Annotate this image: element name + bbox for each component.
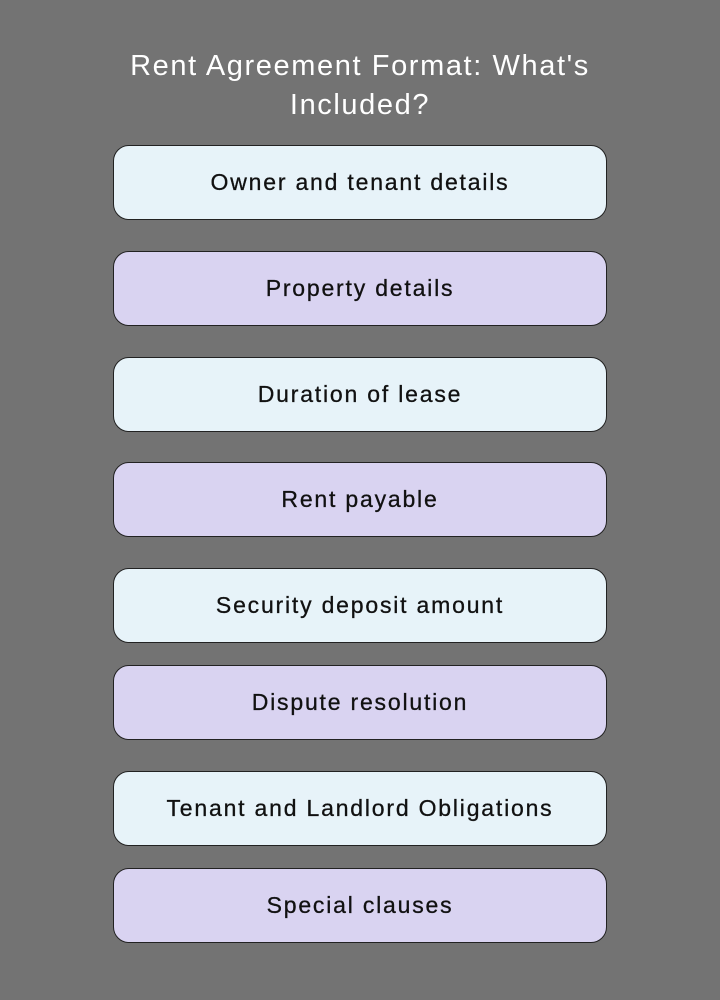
item: dispute resolution bbox=[113, 665, 607, 740]
item: special clauses: Special clauses bbox=[267, 892, 453, 918]
item: obligations: Tenant and Landlord Obligations bbox=[166, 795, 554, 821]
item: security deposit: Security deposit amount bbox=[216, 592, 504, 618]
item: special clauses bbox=[113, 868, 607, 943]
title: Rent Agreement Format: What's bbox=[130, 50, 590, 82]
item: dispute resolution: Dispute resolution bbox=[252, 689, 468, 715]
item: duration of lease bbox=[113, 357, 607, 432]
item: rent payable: Rent payable bbox=[281, 486, 439, 512]
item: duration of lease: Duration of lease bbox=[258, 381, 462, 407]
item: security deposit bbox=[113, 568, 607, 643]
item: obligations bbox=[113, 771, 607, 846]
item: property details: Property details bbox=[266, 275, 454, 301]
item: owner and tenant details bbox=[113, 145, 607, 220]
title bbox=[130, 50, 590, 121]
item: property details bbox=[113, 251, 607, 326]
item: rent payable bbox=[113, 462, 607, 537]
item: owner and tenant details: Owner and tenant details bbox=[211, 169, 509, 195]
title: Included? bbox=[290, 89, 430, 121]
